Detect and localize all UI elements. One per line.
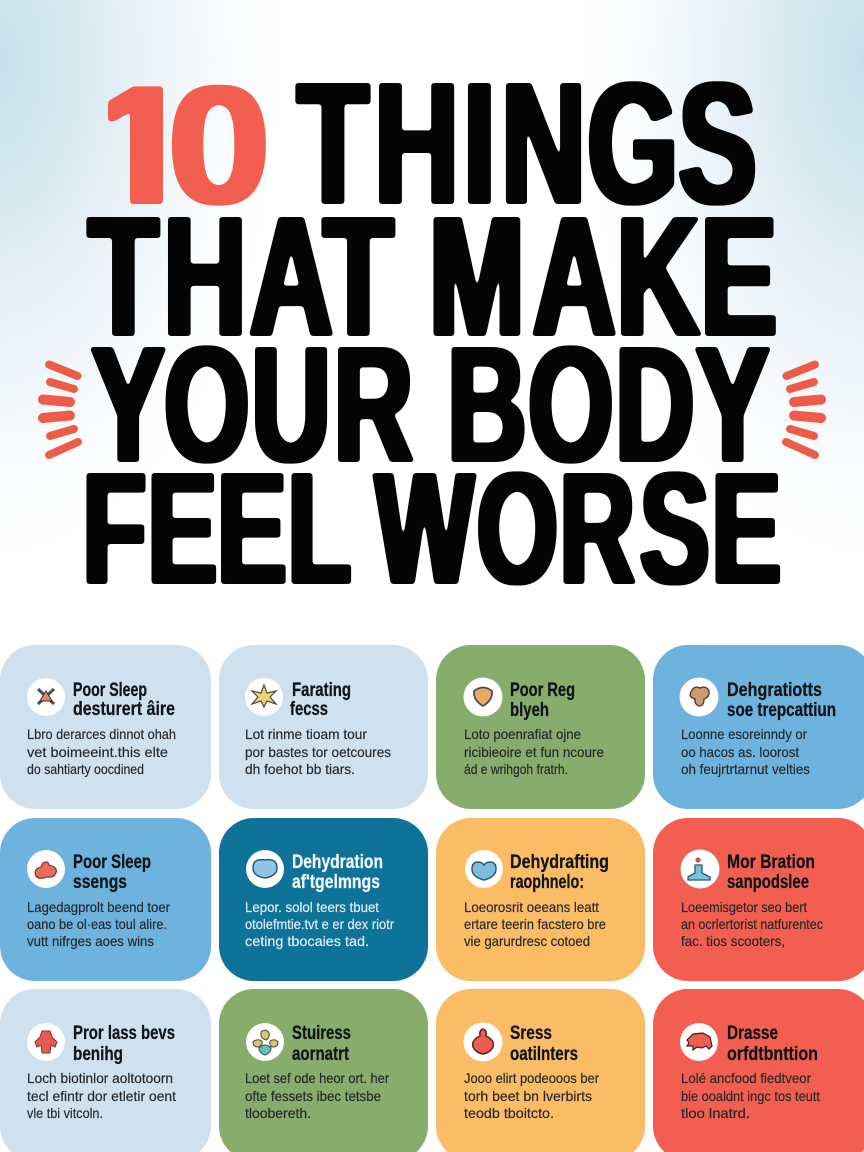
panel: card 6: ceting tbocaies tad.: [245, 933, 369, 949]
panel: card 9: benihg: [73, 1044, 123, 1065]
icon: red figure: [27, 1023, 65, 1061]
panel: card 3: ád e wrihgoh fratrh.: [464, 761, 568, 777]
panel: card 10: ofte fessets ibec tetsbe: [245, 1088, 381, 1104]
panel: card 9: vle tbi vitcoln.: [27, 1105, 103, 1121]
icon: right burst ticks: [786, 364, 821, 455]
title line 1: 1: [92, 52, 194, 239]
panel: card 8: Loeemisgetor seo bert: [681, 899, 807, 915]
title line 2: THAT MAKE: [88, 181, 777, 371]
panel: card 8: Mor Bration: [727, 852, 815, 873]
title line 1: 0: [168, 52, 270, 239]
panel: card 5: [0, 818, 211, 981]
panel: card 12: bie ooaldnt ingc tos teutt: [681, 1088, 820, 1104]
panel: card 1: desturert âire: [73, 699, 175, 720]
panel: card 7: ertare teerin facstero bre: [464, 916, 606, 932]
panel: card 8: fac. tios scooters,: [681, 933, 785, 949]
panel: card 6: Lepor. solol teers tbuet: [245, 899, 379, 915]
panel: card 12: Lolé ancfood fiedtveor: [681, 1070, 811, 1086]
panel: card 12: Drasse: [727, 1023, 778, 1044]
panel: card 11: [436, 989, 645, 1152]
icon: shell: [464, 678, 502, 716]
panel: card 10: [219, 989, 428, 1152]
title: [86, 81, 780, 586]
panel: card 12: [653, 989, 864, 1152]
panel: card 12: tloo lnatrd.: [681, 1105, 750, 1121]
icon: yellow flower: [245, 678, 283, 716]
icon: red bag: [464, 1022, 502, 1062]
panel: card 6: [219, 818, 428, 981]
panel: card 5: vutt nifrges aoes wins: [27, 933, 154, 949]
panel: card 11: Jooo elirt podeooos ber: [464, 1070, 599, 1086]
panel: card 9: tecl efintr dor etletir oent: [27, 1088, 176, 1104]
panel: card 4: soe trepcattiun: [727, 700, 836, 721]
panel: card 10: tloobereth.: [245, 1105, 311, 1121]
panel: card 11: teodb tboitcto.: [464, 1105, 554, 1121]
panel: card 5: ssengs: [73, 872, 127, 893]
panel: card 12: orfdtbnttion: [727, 1044, 818, 1065]
panel: card 9: [0, 989, 211, 1152]
panel: card 1: Lbro derarces dinnot ohah: [27, 726, 176, 742]
icon: petals: [246, 1023, 284, 1061]
panel: card 4: oo hacos as. loorost: [681, 744, 799, 760]
icon: brown lump: [680, 678, 718, 716]
panel: card 2: Lot rinme tioam tour: [245, 726, 367, 742]
panel: card 7: [436, 818, 645, 981]
title line 4: FEEL WORSE: [83, 441, 781, 617]
panel: card 3: ricibieoire et fun ncoure: [464, 744, 604, 760]
panel: card 1: do sahtiarty oocdined: [27, 761, 144, 777]
icon: blue heart: [465, 850, 503, 888]
panel: card 6: Dehydration: [292, 852, 383, 873]
title line 3: YOUR BODY: [91, 312, 769, 496]
panel: card 5: Lagedagprolt beend toer: [27, 899, 170, 915]
panel: card 7: raophnelo:: [510, 872, 584, 893]
title line 1: THINGS: [297, 47, 757, 240]
panel: card 4: Loonne esoreinndy or: [681, 726, 807, 742]
panel: card 3: Loto poenrafiat ojne: [464, 726, 581, 742]
panel: card 10: Loet sef ode heor ort. her: [245, 1070, 389, 1086]
panel: card 1: Poor Sleep: [73, 680, 147, 701]
panel: card 1: vet boimeeint.this elte: [27, 744, 168, 760]
panel: card 5: oano be ol·eas toul alire.: [27, 916, 167, 932]
panel: card 7: vie garurdresc cotoed: [464, 933, 590, 949]
panel: card 10: Stuiress: [292, 1023, 351, 1044]
icon: blue lungs: [246, 850, 284, 888]
panel: card 2: fecss: [290, 699, 328, 720]
title line 1: [108, 81, 756, 206]
icon: seated figure: [680, 850, 720, 888]
panel: card 2: dh foehot bb tiars.: [245, 761, 355, 777]
panel: card 9: Loch biotinlor aoltotoorn: [27, 1070, 173, 1086]
panel: card 9: Pror lass bevs: [73, 1023, 175, 1044]
panel: card 5: Poor Sleep: [73, 852, 151, 873]
icon: left burst ticks: [43, 364, 78, 455]
panel: card 2: [219, 645, 428, 809]
panel: card 4: [653, 645, 864, 809]
panel: card 2: por bastes tor oetcoures: [245, 744, 391, 760]
icon: alarm: [27, 678, 65, 716]
panel: card 3: blyeh: [510, 700, 549, 721]
panel: card 7: Loeorosrit oeeans leatt: [464, 899, 599, 915]
panel: card 10: aornatrt: [292, 1044, 350, 1065]
panel: card 11: torh beet bn lverbirts: [464, 1088, 592, 1104]
panel: card 7: Dehydrafting: [510, 852, 609, 873]
panel: card 3: Poor Reg: [510, 680, 575, 701]
panel: card 8: sanpodslee: [727, 872, 809, 893]
panel: card 11: Sress: [510, 1023, 552, 1044]
panel: card 11: oatilnters: [510, 1044, 578, 1065]
icon: red chunk: [680, 1023, 718, 1061]
panel: card 1: [0, 645, 211, 809]
panel: card 4: oh feujrtrtarnut velties: [681, 761, 810, 777]
panel: card 6: otolefmtie.tvt e er dex riotr: [245, 916, 394, 932]
panel: card 3: [436, 645, 645, 809]
panel: card 6: af'tgelmngs: [292, 872, 380, 893]
panel: card 4: Dehgratiotts: [727, 680, 822, 701]
panel: card 2: Farating: [292, 680, 351, 701]
panel: card 8: an ocrlertorist natfurentec: [681, 916, 823, 932]
icon: red blob: [27, 850, 65, 888]
panel: card 8: [653, 818, 864, 981]
